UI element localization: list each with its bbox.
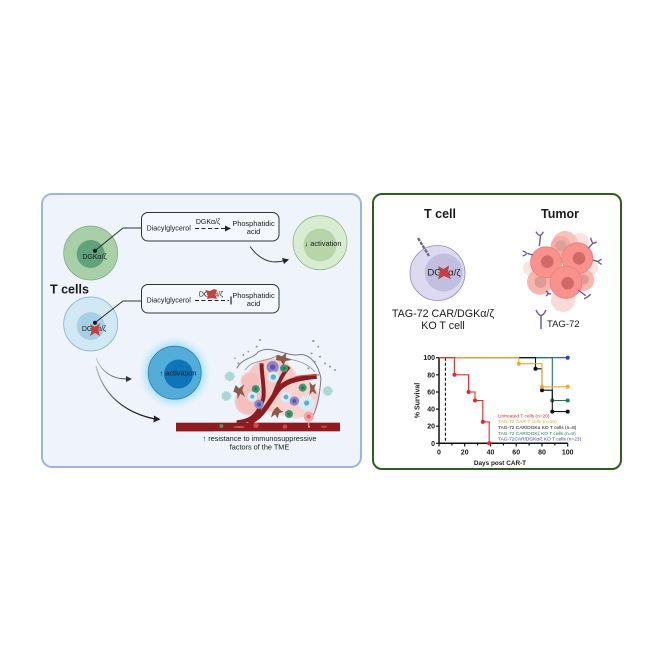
y axis title: % Survival	[414, 383, 422, 418]
caption: CAR T cell	[392, 308, 494, 332]
icon: T cell with DGK: DGKα/ζ	[82, 254, 107, 261]
reaction box: DGK active: DGKα/ζ	[196, 219, 220, 226]
x tick labels: 0	[437, 450, 441, 456]
treatment day marker	[444, 358, 446, 443]
chart legend: TAG-72 CAR-T cells (n=15)	[498, 419, 557, 425]
curve: green	[519, 358, 570, 402]
curve: orange	[439, 358, 570, 389]
chart legend: TAG-72 CAR/DGKζ KO T cells (n=8)	[498, 431, 576, 437]
curve: blue	[439, 356, 570, 360]
reaction box: DGK active	[142, 212, 279, 241]
icon: T cell with DGK	[64, 226, 141, 280]
y tick labels: 80	[427, 372, 435, 379]
y tick labels: 20	[427, 424, 435, 431]
curve: red	[439, 358, 491, 445]
arrow: to reduced activation	[250, 246, 289, 264]
icon: reduced activation cell: ↓ activation	[305, 239, 341, 248]
chart: survival curves	[414, 355, 582, 467]
chart legend: Untreated T cells (n=20)	[498, 413, 550, 419]
legend: TAG-72 receptor	[536, 310, 580, 330]
chart legend: TAG-72 CAR/DGKα KO T cells (n=8)	[498, 425, 577, 431]
reaction box: DGK knocked out: acid	[247, 299, 260, 308]
icon: T cell with DGK knocked out: DGKα/ζ	[82, 326, 106, 333]
reaction box: DGK knocked out: Phosphatidic	[232, 291, 275, 300]
icon: reduced activation cell	[293, 216, 347, 270]
chart legend	[498, 413, 582, 443]
y tick labels: 60	[427, 390, 435, 396]
y tick labels: 40	[427, 407, 435, 414]
x tick labels: 40	[487, 450, 494, 456]
chart legend: TAG-72CAR/DGKα/ζ KO T cells (n=23)	[498, 437, 582, 443]
caption: TME resistance	[203, 434, 316, 452]
caption: TME resistance: ↑ resistance to immunosuppressive	[203, 434, 316, 443]
x tick labels: 100	[562, 450, 574, 456]
x tick labels: 80	[538, 450, 546, 456]
panel: T cells mechanism	[42, 194, 361, 467]
icon: increased activation cell	[138, 336, 212, 410]
x tick labels: 60	[512, 450, 520, 456]
icon: increased activation cell: ↑ activation	[160, 368, 196, 378]
immune cells	[247, 361, 314, 418]
vessel overhang left	[176, 423, 215, 431]
y tick labels	[423, 355, 435, 448]
panel: CAR T and tumor results	[373, 194, 621, 469]
reaction box: DGK knocked out: DGKα/ζ	[199, 292, 223, 298]
reaction box: DGK knocked out: Diacylglycerol	[146, 296, 191, 304]
illustration: tumor microenvironment	[215, 339, 340, 431]
y tick labels: 0	[431, 441, 435, 448]
heading: Tumor: Tumor	[541, 207, 579, 221]
caption: CAR T cell: TAG-72 CAR/DGKα/ζ	[392, 308, 494, 320]
arrow: to TME resistance	[96, 366, 160, 422]
caption: TME resistance: factors of the TME	[230, 442, 289, 452]
heading: T cell: T cell	[424, 207, 456, 221]
y tick labels: 100	[423, 355, 435, 362]
icon: CAR T cell with knockout	[410, 238, 465, 300]
icon: T cell with DGK knocked out	[64, 297, 141, 351]
fibroblasts	[233, 352, 317, 418]
reaction box: DGK active: Phosphatidic	[232, 219, 275, 228]
legend: TAG-72 receptor: TAG-72	[547, 319, 580, 330]
x axis title: Days post CAR-T	[474, 460, 526, 467]
icon: CAR T cell with knockout: DGKα/ζ	[427, 268, 461, 278]
caption: CAR T cell: KO T cell	[421, 320, 465, 332]
reaction box: DGK active: Diacylglycerol	[146, 224, 191, 232]
heading: T cells: T cells	[50, 282, 89, 296]
blood vessel	[215, 363, 340, 431]
x tick labels	[437, 450, 574, 456]
reaction box: DGK active: acid	[247, 227, 260, 236]
axes	[436, 358, 568, 446]
x tick labels: 20	[461, 450, 469, 456]
arrow: to increased activation	[96, 358, 132, 382]
curve: black	[519, 358, 570, 414]
virus-like factors	[222, 372, 332, 400]
reaction box: DGK knocked out	[142, 284, 279, 313]
icon: tumor cluster	[523, 231, 602, 312]
